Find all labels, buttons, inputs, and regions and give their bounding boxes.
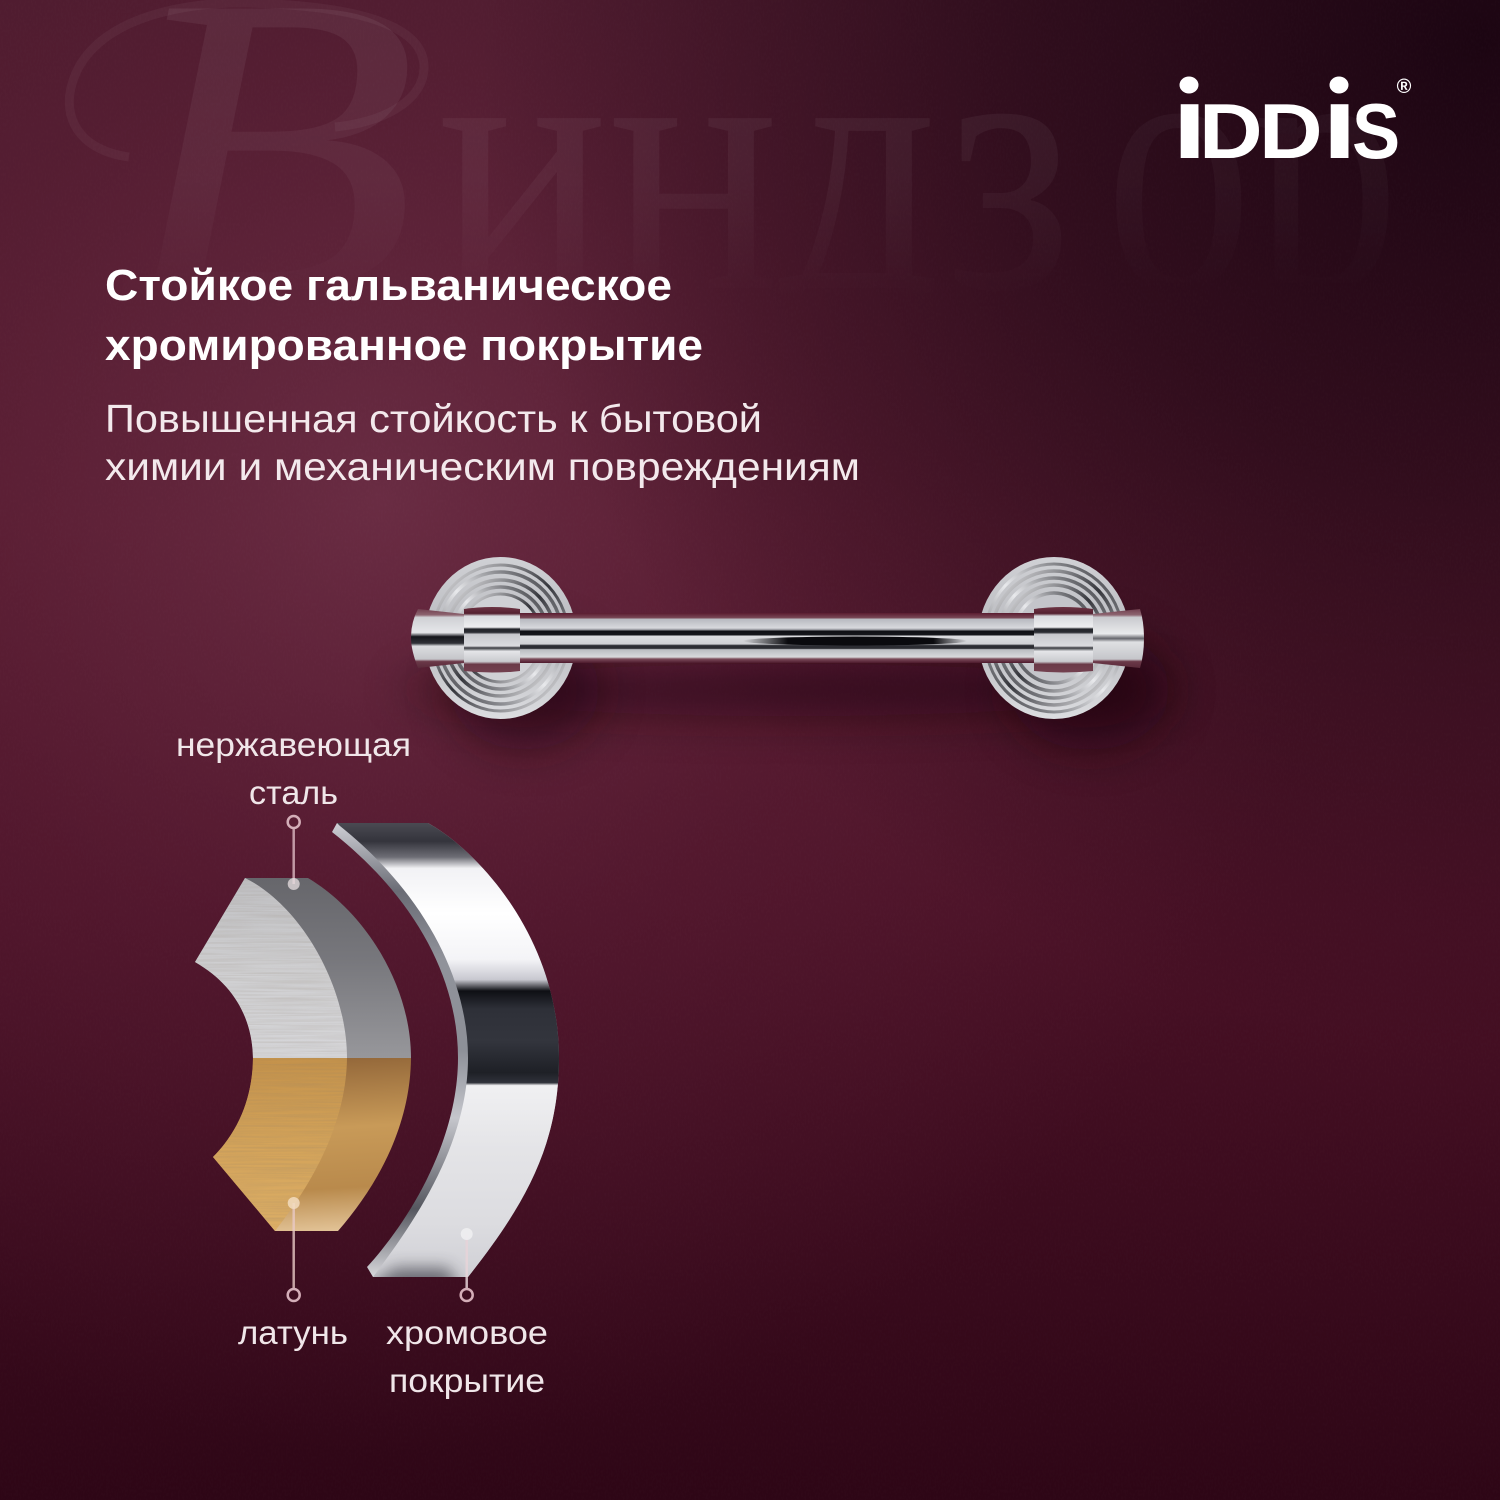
callout: brass bbox=[238, 1197, 348, 1351]
heading bbox=[105, 261, 703, 370]
callout: stainless steel: нержавеющая bbox=[176, 726, 411, 763]
logo: IDDIS: S bbox=[1352, 87, 1400, 175]
left end cap bbox=[411, 609, 464, 668]
logo: IDDIS: D bbox=[1259, 88, 1323, 175]
subheading text: химии и механическим повреждениям bbox=[105, 446, 860, 489]
diagram: material layers cross-section bbox=[190, 823, 559, 1295]
callout: chrome coating: хромовое bbox=[386, 1314, 548, 1351]
logo: IDDIS: D bbox=[1199, 88, 1263, 175]
product photo: chrome towel handle bbox=[400, 557, 1180, 750]
right end cap bbox=[1093, 609, 1144, 668]
subheading text bbox=[105, 398, 860, 489]
layer: stainless steel bbox=[195, 878, 411, 1060]
right rosette bbox=[978, 557, 1130, 719]
right collar bbox=[1034, 607, 1093, 672]
heading: хромированное покрытие bbox=[105, 321, 703, 370]
callout: stainless steel: сталь bbox=[249, 774, 338, 811]
logo: IDDIS: ® bbox=[1397, 76, 1412, 98]
callout: brass: латунь bbox=[238, 1314, 348, 1351]
logo: IDDIS bbox=[1172, 76, 1412, 175]
brushed metal texture bbox=[196, 880, 346, 1221]
callout: stainless steel bbox=[176, 726, 411, 890]
handle bar bbox=[515, 613, 1040, 663]
layer: brass bbox=[213, 1056, 411, 1231]
watermark: collection name bbox=[69, 0, 1400, 384]
callout: chrome coating: покрытие bbox=[389, 1362, 545, 1399]
subheading text: Повышенная стойкость к бытовой bbox=[105, 398, 762, 441]
logo: IDDIS: I bbox=[1172, 87, 1207, 175]
left rosette bbox=[424, 557, 576, 719]
layer: chrome plating bbox=[332, 823, 559, 1295]
callout: chrome coating bbox=[386, 1228, 548, 1399]
heading: Стойкое гальваническое bbox=[105, 261, 672, 310]
left collar bbox=[464, 607, 520, 672]
logo: IDDIS: I bbox=[1322, 87, 1357, 175]
